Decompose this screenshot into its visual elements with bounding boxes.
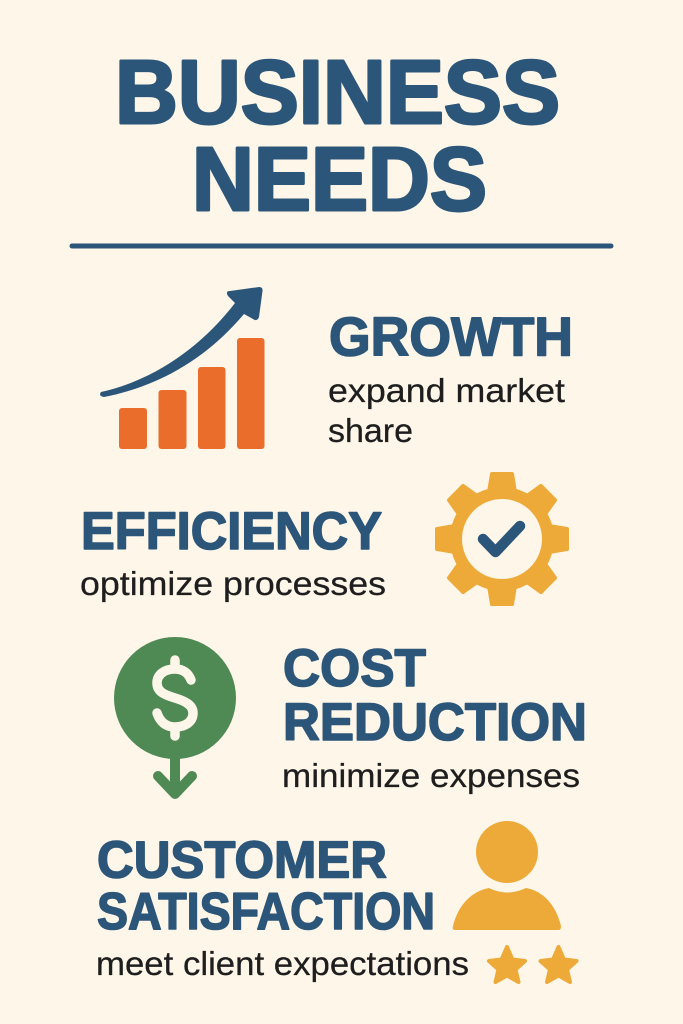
heading: efficiency: EFFICIENCY bbox=[81, 502, 382, 561]
text: growth description: share bbox=[328, 412, 413, 449]
heading: cost reduction: REDUCTION bbox=[283, 693, 587, 752]
text: cost reduction description: minimize expenses bbox=[282, 757, 580, 794]
text: efficiency description: optimize processes bbox=[80, 565, 386, 602]
text: customer satisfaction description: meet client expectations bbox=[96, 945, 469, 982]
title: BUSINESS bbox=[115, 43, 560, 143]
title bbox=[115, 43, 560, 230]
panel: growth bbox=[100, 287, 573, 449]
panel: customer satisfaction bbox=[96, 821, 576, 982]
title: NEEDS bbox=[192, 130, 487, 230]
text: growth description bbox=[328, 372, 565, 449]
heading: cost reduction bbox=[283, 639, 587, 752]
icon: gear with check bbox=[437, 474, 567, 604]
heading: customer satisfaction: CUSTOMER bbox=[97, 832, 387, 890]
heading: cost reduction: COST bbox=[283, 639, 426, 698]
text: growth description: expand market bbox=[328, 372, 565, 409]
heading: customer satisfaction: SATISFACTION bbox=[97, 883, 435, 941]
icon: bar chart with rising arrow bbox=[100, 287, 264, 449]
panel: efficiency bbox=[80, 474, 567, 604]
heading: growth: GROWTH bbox=[329, 306, 573, 368]
panel: cost reduction bbox=[114, 637, 587, 794]
icon: dollar coin with down arrow bbox=[114, 637, 236, 794]
icon: rating stars bbox=[489, 947, 576, 982]
heading: customer satisfaction bbox=[97, 832, 435, 941]
icon: customer person bbox=[453, 821, 561, 930]
